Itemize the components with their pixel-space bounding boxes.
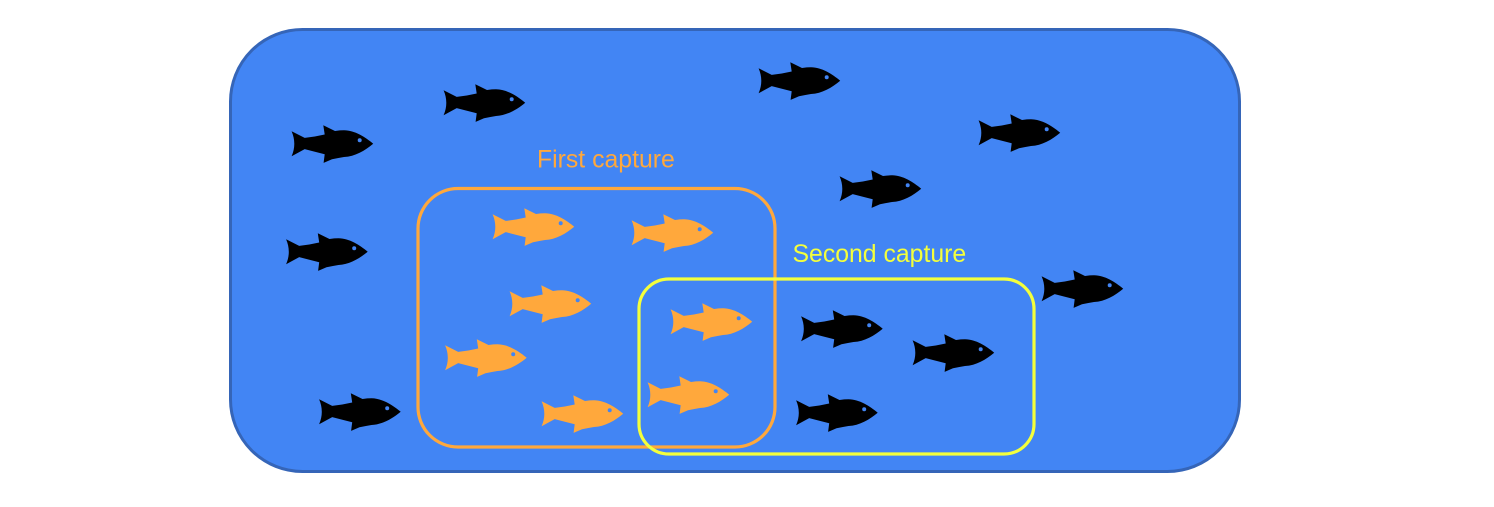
first capture box <box>418 188 775 447</box>
label: second capture: Second capture <box>792 241 966 268</box>
fish 6 <box>286 233 368 271</box>
fish 1 <box>292 125 373 163</box>
panel: lake <box>230 30 1240 472</box>
marked fish 2 <box>632 214 713 252</box>
marked fish 3 <box>510 285 591 323</box>
fish 10 <box>796 394 878 432</box>
orange fish group <box>445 208 752 433</box>
fish 2 <box>444 84 525 122</box>
black fish group <box>286 62 1123 432</box>
fish 11 <box>319 393 401 431</box>
fish 4 <box>979 114 1060 152</box>
marked fish 1 <box>493 208 574 246</box>
label: first capture: First capture <box>537 146 675 173</box>
second capture box <box>639 279 1034 454</box>
fish 9 <box>913 334 994 372</box>
fish 5 <box>840 170 921 208</box>
marked fish 5 <box>445 339 527 377</box>
fish 3 <box>759 62 840 100</box>
fish 7 <box>1042 270 1123 308</box>
marked fish 7 <box>648 376 729 414</box>
marked fish 6 <box>542 395 623 433</box>
fish 8 <box>801 310 883 348</box>
marked fish 4 <box>671 303 752 341</box>
